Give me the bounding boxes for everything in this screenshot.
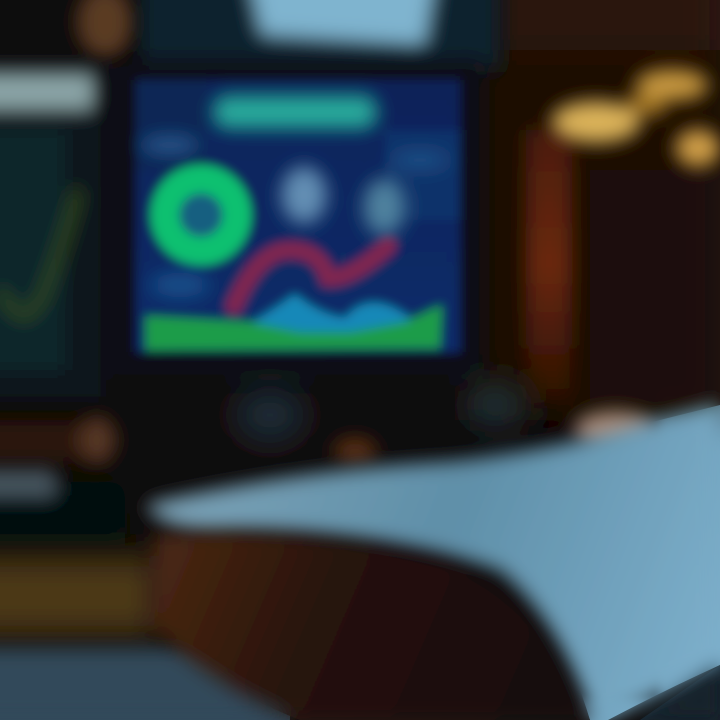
pillow [145, 405, 720, 720]
desk objects under the monitor [232, 379, 529, 445]
green base bar [146, 305, 442, 350]
top left wood accent [77, 0, 133, 58]
red line chart [234, 246, 388, 306]
upper monitor [140, 0, 500, 72]
donut chart [165, 179, 237, 251]
dark corner [640, 665, 720, 720]
wood column [526, 130, 572, 400]
chart icons [140, 135, 448, 297]
brown body [150, 533, 590, 720]
blue hills chart [235, 294, 420, 335]
wood wall on the right [470, 0, 720, 420]
main monitor screen [136, 80, 460, 352]
floor lower left [0, 648, 290, 720]
ceiling lights [552, 70, 720, 166]
wooden surface lower left [0, 556, 160, 636]
left monitor [0, 62, 106, 402]
left desk object [0, 470, 125, 544]
main monitor frame [112, 62, 484, 380]
warm accents [0, 412, 655, 464]
screen title bar [214, 96, 376, 128]
